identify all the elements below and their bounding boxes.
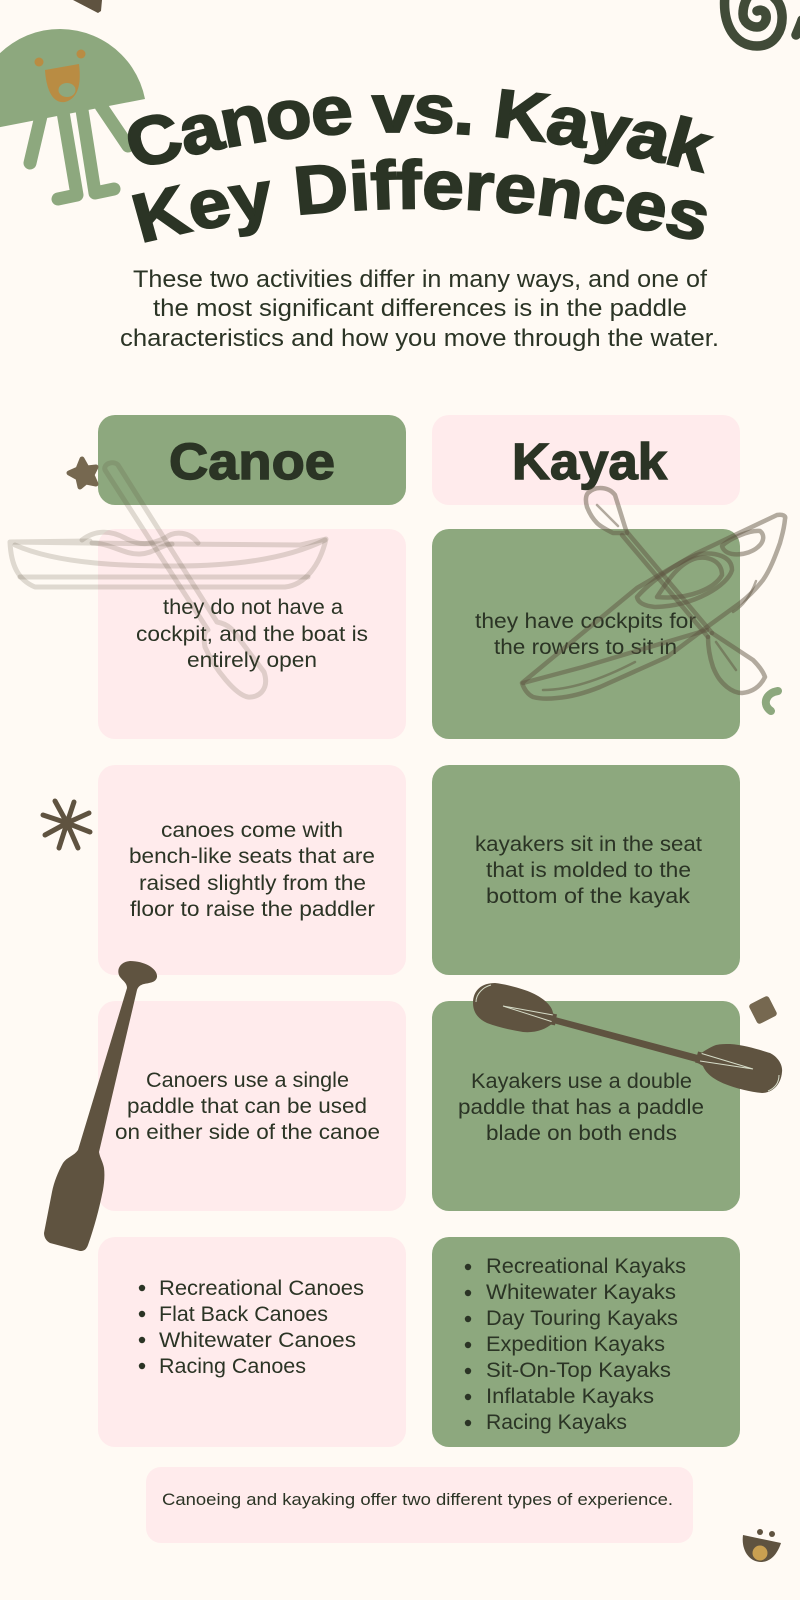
panel: kayak seats: kayakers sit in the seat — [475, 832, 702, 856]
panel: kayak cockpit: the rowers to sit in — [494, 635, 677, 659]
intro text: the most significant differences is in the paddle — [153, 295, 687, 322]
panel: canoe types list: Racing Canoes — [159, 1354, 306, 1378]
panel: kayak seats: that is molded to the — [486, 858, 691, 882]
icon: single canoe paddle — [44, 961, 157, 1251]
panel: kayak types list: Day Touring Kayaks — [486, 1306, 678, 1330]
title: Canoe vs. Kayak — [128, 88, 714, 174]
intro text: characteristics and how you move through the water. — [120, 325, 719, 352]
panel: canoe seats: floor to raise the paddler — [130, 897, 375, 921]
panel: canoe types list: Whitewater Canoes — [159, 1328, 356, 1352]
panel: canoe types list: Recreational Canoes — [159, 1276, 364, 1300]
panel: kayak types list: Inflatable Kayaks — [486, 1384, 654, 1408]
panel: kayak types list: Expedition Kayaks — [486, 1332, 665, 1356]
panel: canoe seats: canoes come with — [161, 818, 343, 842]
panel: kayak header: Kayak — [512, 433, 668, 490]
panel: footer note — [146, 1467, 693, 1543]
panel: canoe header — [98, 415, 406, 505]
panel: kayak types list: Recreational Kayaks — [486, 1254, 686, 1278]
panel: canoe types list — [98, 1237, 406, 1447]
panel: canoe paddle text: paddle that can be used — [127, 1094, 367, 1118]
intro text: These two activities differ in many ways, and one of — [133, 266, 707, 293]
panel: canoe seats: bench-like seats that are — [129, 844, 375, 868]
panel: kayak types list: Racing Kayaks — [486, 1410, 627, 1434]
panel: canoe paddle text — [98, 1001, 406, 1211]
title — [128, 88, 714, 243]
panel: kayak types list — [432, 1237, 740, 1447]
intro text — [120, 266, 719, 352]
panel: kayak seats: bottom of the kayak — [486, 884, 690, 908]
panel: kayak cockpit: they have cockpits for — [475, 609, 696, 633]
panel: kayak seats — [432, 765, 740, 975]
icon: canoe outline with paddle — [10, 463, 326, 697]
panel: kayak paddle text — [432, 1001, 740, 1211]
title: Key Differences — [132, 158, 707, 243]
panel: canoe cockpit — [98, 529, 406, 739]
panel: kayak paddle text: blade on both ends — [486, 1121, 677, 1145]
panel: canoe cockpit: entirely open — [187, 648, 317, 672]
panel: kayak paddle text: Kayakers use a double — [471, 1069, 692, 1093]
panel: canoe paddle text: Canoers use a single — [146, 1068, 349, 1092]
icon: top triangle — [73, 0, 102, 13]
panel: canoe header: Canoe — [169, 433, 335, 490]
icon: smiling face — [743, 1529, 781, 1562]
icon: small square — [748, 995, 778, 1025]
panel: kayak cockpit — [432, 529, 740, 739]
panel: kayak types list: Whitewater Kayaks — [486, 1280, 676, 1304]
icon: spiral — [725, 0, 800, 46]
icon: star — [69, 459, 96, 487]
panel: kayak header — [432, 415, 740, 505]
icon: green curl — [766, 691, 778, 711]
panel: canoe seats — [98, 765, 406, 975]
panel: canoe seats: raised slightly from the — [139, 871, 366, 895]
icon: jellyfish mascot — [0, 29, 145, 199]
panel: canoe cockpit: they do not have a — [163, 595, 343, 619]
panel: kayak types list: Sit-On-Top Kayaks — [486, 1358, 671, 1382]
icon: kayak outline with paddle — [522, 488, 785, 699]
panel: canoe types list: Flat Back Canoes — [159, 1302, 328, 1326]
panel: footer note: Canoeing and kayaking offer two different types of experience. — [162, 1490, 673, 1509]
panel: kayak paddle text: paddle that has a paddle — [458, 1095, 704, 1119]
panel: canoe paddle text: on either side of the canoe — [115, 1120, 380, 1144]
icon: double kayak paddle — [473, 983, 782, 1093]
panel: canoe cockpit: cockpit, and the boat is — [136, 622, 368, 646]
icon: asterisk — [43, 801, 90, 848]
